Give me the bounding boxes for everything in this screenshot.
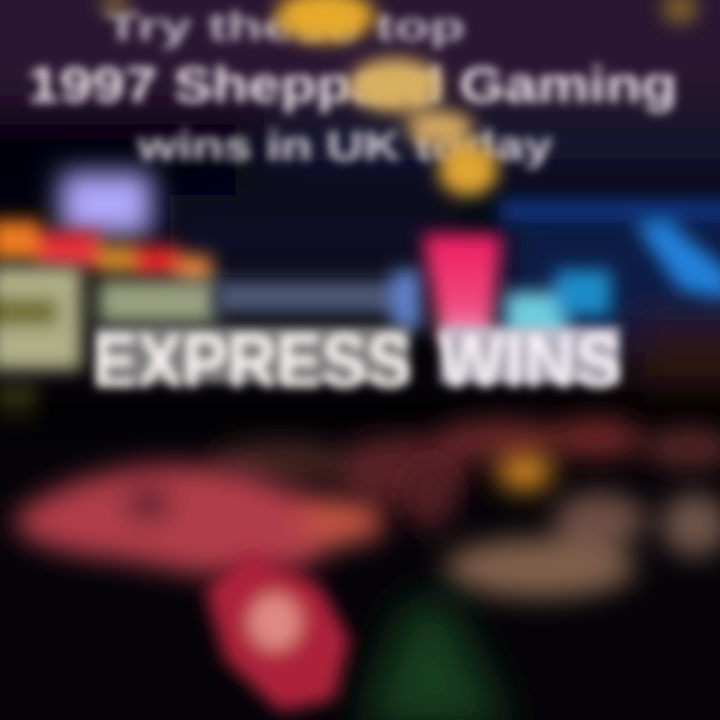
red chip group left	[15, 454, 553, 575]
lavender sign	[60, 172, 152, 236]
main glowing sign text: EXPRESS	[92, 317, 412, 405]
pink neon panel	[422, 234, 502, 340]
dark divider band	[0, 402, 720, 426]
background: dark purple sky	[0, 0, 720, 390]
rainbow banner	[0, 220, 212, 283]
blue neon panels	[500, 200, 720, 342]
green felt	[360, 595, 510, 720]
title text: 1997 Sheppard Gaming	[27, 57, 677, 113]
main glowing sign text: WINS	[438, 317, 622, 405]
background casino chips: upper row	[210, 418, 720, 504]
main glowing sign text	[92, 317, 622, 405]
tan chips right	[404, 459, 720, 598]
grey upper sign strip	[215, 270, 422, 330]
title text: wins in UK today	[136, 122, 553, 169]
title text	[27, 5, 677, 169]
large red chip	[205, 550, 350, 712]
olive side panel	[0, 266, 216, 418]
title text: Try these top	[105, 5, 465, 49]
gold coins	[101, 0, 698, 196]
